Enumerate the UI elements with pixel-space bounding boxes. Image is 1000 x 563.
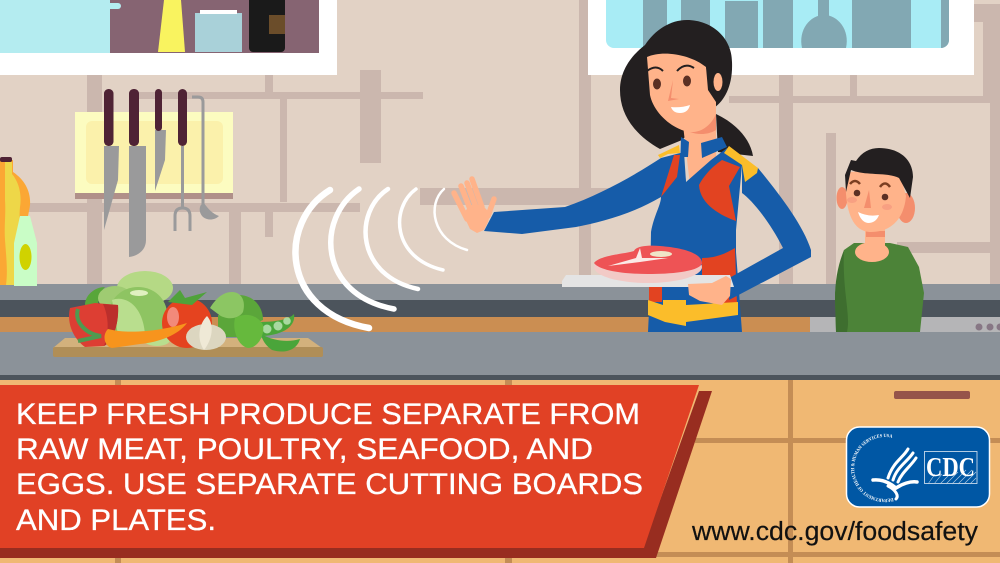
raised hand	[454, 179, 494, 233]
belt	[648, 300, 738, 326]
hair	[845, 148, 913, 198]
yellow shoulders	[658, 145, 758, 182]
pea pods	[258, 314, 300, 352]
carrot	[105, 323, 187, 348]
steak	[594, 246, 702, 283]
garlic	[186, 316, 226, 350]
logo: HHS and CDC	[846, 426, 990, 508]
face details	[847, 181, 892, 223]
eyes and brows	[647, 66, 694, 90]
vegetables on cutting board	[53, 271, 323, 357]
HHS seal ring text: DEPARTMENT OF HEALTH & HUMAN SERVICES USA	[850, 434, 894, 502]
character: boy	[835, 148, 924, 332]
countertop	[0, 332, 1000, 380]
broccoli	[210, 292, 263, 348]
icon: fork	[175, 89, 190, 231]
collar	[680, 137, 727, 182]
left arm	[484, 158, 661, 234]
ears	[836, 187, 848, 209]
hair	[620, 20, 732, 149]
website url: www.cdc.gov/foodsafety	[691, 518, 978, 546]
icon: ladle	[192, 97, 219, 220]
suit red panels	[649, 155, 740, 305]
suit torso	[648, 148, 742, 332]
red pepper	[69, 303, 118, 347]
left wall cabinet	[0, 0, 337, 75]
right wall cabinet	[588, 0, 974, 75]
supporting hand	[688, 276, 731, 305]
head	[846, 170, 906, 232]
bottles	[0, 157, 37, 286]
counter back	[0, 284, 1000, 332]
banner with message	[0, 385, 712, 558]
nose and smile	[668, 80, 690, 113]
icon: knife two	[129, 89, 146, 257]
plate tray	[562, 275, 734, 287]
face	[647, 54, 716, 132]
knife rack	[75, 89, 233, 257]
icon: knife three	[155, 89, 166, 191]
message text: EGGS. USE SEPARATE CUTTING BOARDS	[16, 468, 643, 501]
tomato	[162, 290, 212, 348]
neck	[683, 125, 716, 185]
right arm	[729, 163, 811, 300]
message text: AND PLATES.	[16, 504, 216, 537]
icon: knife one	[104, 89, 119, 230]
CDC box: CDC	[926, 452, 975, 482]
message text: KEEP FRESH PRODUCE SEPARATE FROM	[16, 398, 640, 431]
sweater	[835, 243, 924, 332]
hair ponytail	[716, 114, 753, 156]
message text	[16, 398, 643, 537]
lower cabinets	[0, 380, 1000, 563]
icon: motion arcs for stop gesture	[295, 189, 467, 328]
cabbage	[85, 271, 173, 346]
HHS eagle	[873, 449, 917, 499]
character: woman superhero	[454, 20, 811, 332]
cutting board	[53, 338, 323, 357]
message text: RAW MEAT, POULTRY, SEAFOOD, AND	[16, 433, 593, 466]
